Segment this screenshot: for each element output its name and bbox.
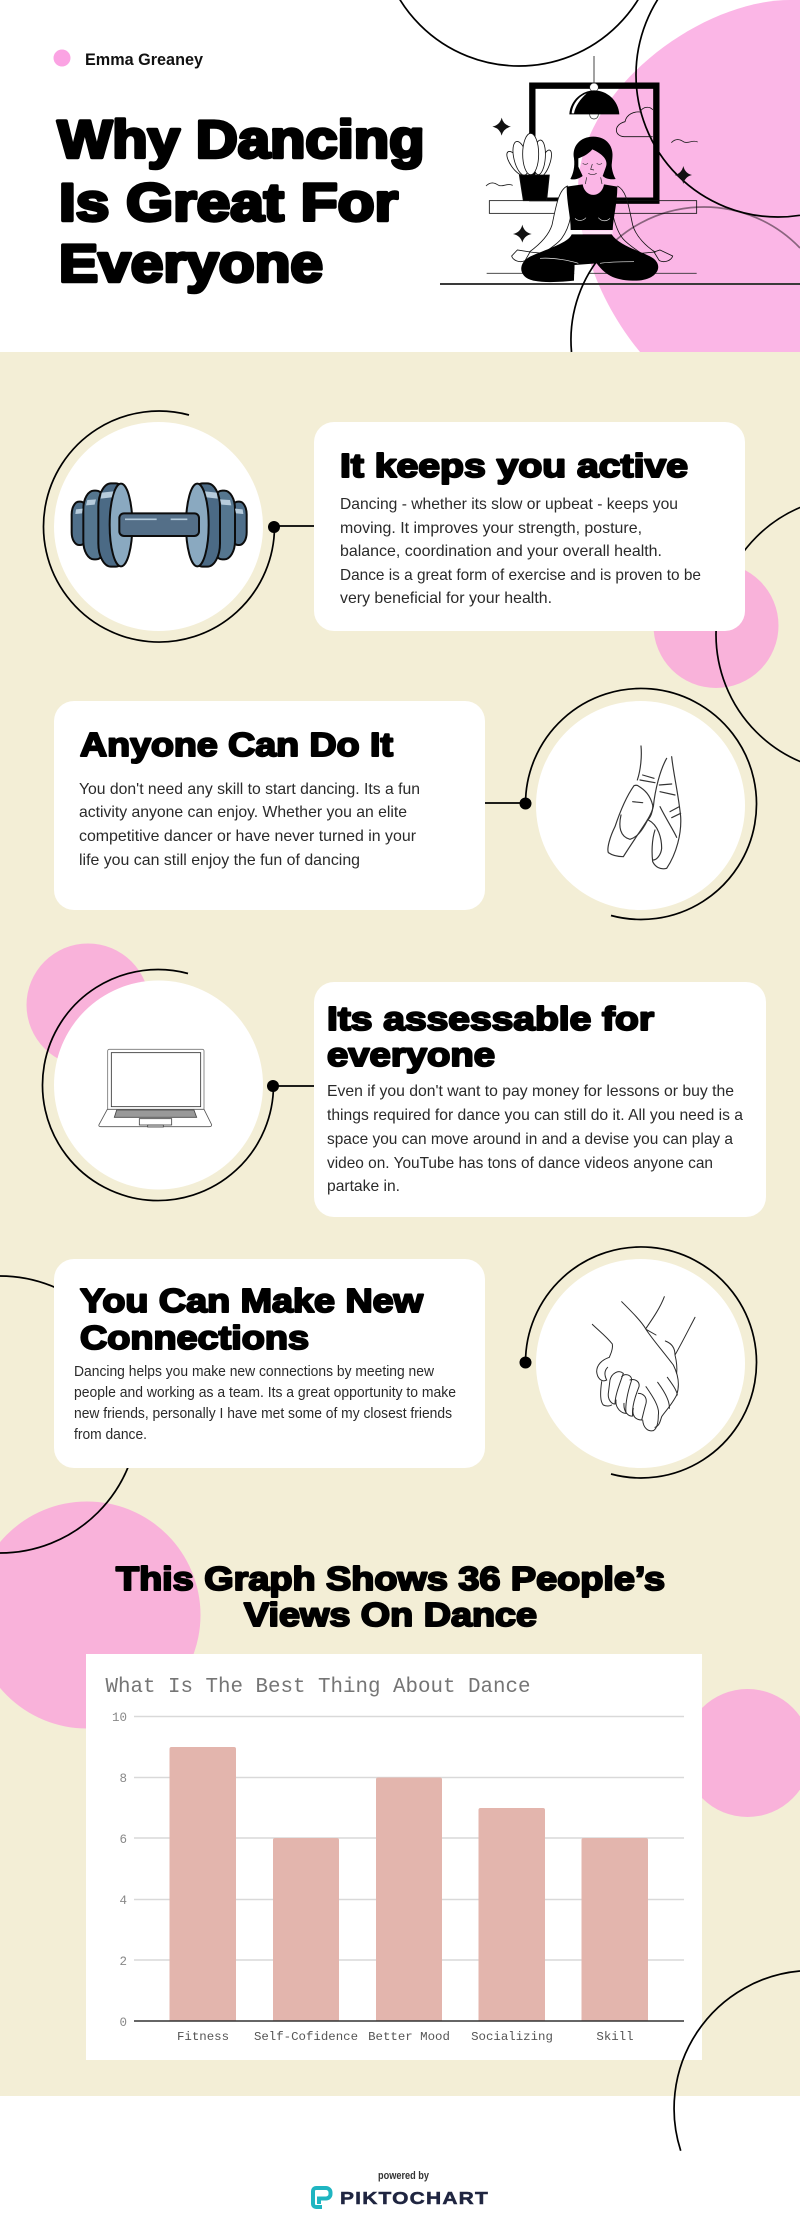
y axis labels: 10 — [112, 1711, 127, 1725]
x axis labels: Fitness — [177, 2030, 229, 2044]
icon circle — [536, 1259, 745, 1468]
heading — [80, 1282, 423, 1356]
card — [314, 422, 745, 631]
x axis — [134, 2020, 684, 2022]
icon: ballet shoes — [608, 746, 681, 869]
body text: Even if you don't want to pay money for lessons or buy the — [327, 1083, 734, 1100]
x axis labels: Better Mood — [368, 2030, 450, 2044]
grid lines — [134, 1716, 684, 1960]
body text: Dancing - whether its slow or upbeat - keeps you — [340, 496, 678, 513]
panel: anyone can do it — [54, 688, 756, 919]
header pink blob — [578, 0, 800, 352]
illustration: meditating woman — [440, 56, 800, 284]
body text: space you can move around in and a devise you can play a — [327, 1131, 733, 1148]
heading — [327, 1000, 654, 1073]
heading: You Can Make New — [80, 1282, 423, 1319]
body text: balance, coordination and your overall health. — [340, 543, 662, 560]
body text: things required for dance you can still do it. All you need is a — [327, 1107, 743, 1124]
decoration: right pink circle — [654, 563, 778, 688]
title — [58, 110, 425, 294]
body text: Dancing helps you make new connections by meeting new — [74, 1363, 434, 1380]
cream background band — [0, 352, 800, 2096]
card — [54, 701, 485, 910]
lower header arc — [571, 207, 800, 352]
body text: new friends, personally I have met some of my closest friends — [74, 1405, 452, 1422]
connector arc — [43, 970, 274, 1201]
heading: Anyone Can Do It — [80, 726, 393, 763]
title: Everyone — [59, 234, 323, 294]
icon: dumbbell — [72, 483, 247, 567]
decoration: pink circle — [26, 944, 150, 1066]
connector dot — [520, 1356, 532, 1368]
chart title: What Is The Best Thing About Dance — [106, 1676, 530, 1699]
body text: from dance. — [74, 1426, 147, 1443]
window frame — [532, 86, 656, 201]
logo mark — [313, 2188, 330, 2207]
y axis labels: 4 — [119, 1894, 127, 1908]
card — [314, 982, 766, 1217]
powered by: powered by — [378, 2170, 430, 2182]
body text — [327, 1083, 743, 1195]
decoration: right pink circle beside chart — [684, 1689, 800, 1817]
card — [54, 1259, 485, 1468]
heading: Connections — [80, 1319, 309, 1356]
decoration: bottom right outline arc — [674, 1971, 800, 2151]
graph heading — [116, 1560, 665, 1633]
y axis labels: 2 — [119, 1955, 127, 1969]
icon circle — [54, 422, 263, 631]
icon: holding hands — [592, 1297, 695, 1431]
author dot — [54, 50, 70, 66]
woman — [512, 137, 673, 282]
squiggles — [486, 140, 698, 186]
body text: people and working as a team. Its a great opportunity to make — [74, 1384, 456, 1401]
decoration: right outline circle — [716, 496, 800, 772]
wordmark: PIKTOCHART — [340, 2188, 489, 2208]
title: Is Great For — [59, 174, 398, 232]
icon circle — [54, 980, 263, 1190]
body text: partake in. — [327, 1178, 400, 1195]
heading: everyone — [327, 1036, 495, 1073]
graph heading: Views On Dance — [244, 1596, 537, 1633]
x axis labels — [177, 2030, 634, 2044]
chart background — [86, 1654, 702, 2060]
plant — [504, 133, 554, 201]
y axis labels — [112, 1711, 127, 2030]
graph heading: This Graph Shows 36 People’s — [116, 1560, 665, 1597]
shelf — [489, 201, 697, 213]
panel: it keeps you active — [44, 411, 745, 642]
body text — [79, 781, 420, 869]
x axis labels: Socializing — [471, 2030, 553, 2044]
lamp — [569, 56, 619, 119]
title: Why Dancing — [58, 110, 425, 170]
cloud — [616, 107, 653, 137]
connector arc — [44, 411, 274, 642]
connector arc — [526, 688, 756, 919]
body text — [340, 496, 701, 607]
connector arc — [526, 1247, 756, 1478]
panel: its assessable for everyone — [26, 944, 766, 1217]
icon: laptop — [99, 1049, 212, 1127]
heading: Its assessable for — [327, 1000, 654, 1037]
body text — [74, 1363, 456, 1443]
header outline arcs — [379, 0, 800, 217]
body text: very beneficial for your health. — [340, 590, 552, 607]
x axis labels: Self-Cofidence — [254, 2030, 358, 2044]
y axis labels: 8 — [119, 1772, 127, 1786]
body text: moving. It improves your strength, posture, — [340, 520, 642, 537]
decoration: large pink circle lower left — [0, 1502, 200, 1728]
x axis labels: Skill — [596, 2030, 634, 2044]
body text: Dance is a great form of exercise and is proven to be — [340, 567, 701, 584]
heading: It keeps you active — [340, 447, 688, 484]
bar chart — [86, 1654, 702, 2060]
body text: competitive dancer or have never turned in your — [79, 828, 417, 845]
connector line and dot — [268, 521, 316, 533]
decoration: left outline circle — [0, 1276, 138, 1553]
panel: you can make new connections — [54, 1247, 756, 1478]
body text: You don't need any skill to start dancing. Its a fun — [79, 781, 420, 798]
author name: Emma Greaney — [85, 50, 204, 69]
footer: piktochart branding — [313, 2170, 489, 2208]
body text: activity anyone can enjoy. Whether you an elite — [79, 804, 407, 821]
body text: life you can still enjoy the fun of dancing — [79, 852, 360, 869]
body text: video on. YouTube has tons of dance videos anyone can — [327, 1155, 713, 1172]
connector line and dot — [485, 798, 532, 810]
bars — [170, 1747, 648, 2021]
connector line and dot — [267, 1080, 316, 1092]
floor lines — [487, 272, 697, 275]
sparkles — [492, 118, 692, 243]
y axis labels: 6 — [119, 1833, 127, 1847]
y axis labels: 0 — [119, 2016, 127, 2030]
icon circle — [536, 701, 745, 910]
